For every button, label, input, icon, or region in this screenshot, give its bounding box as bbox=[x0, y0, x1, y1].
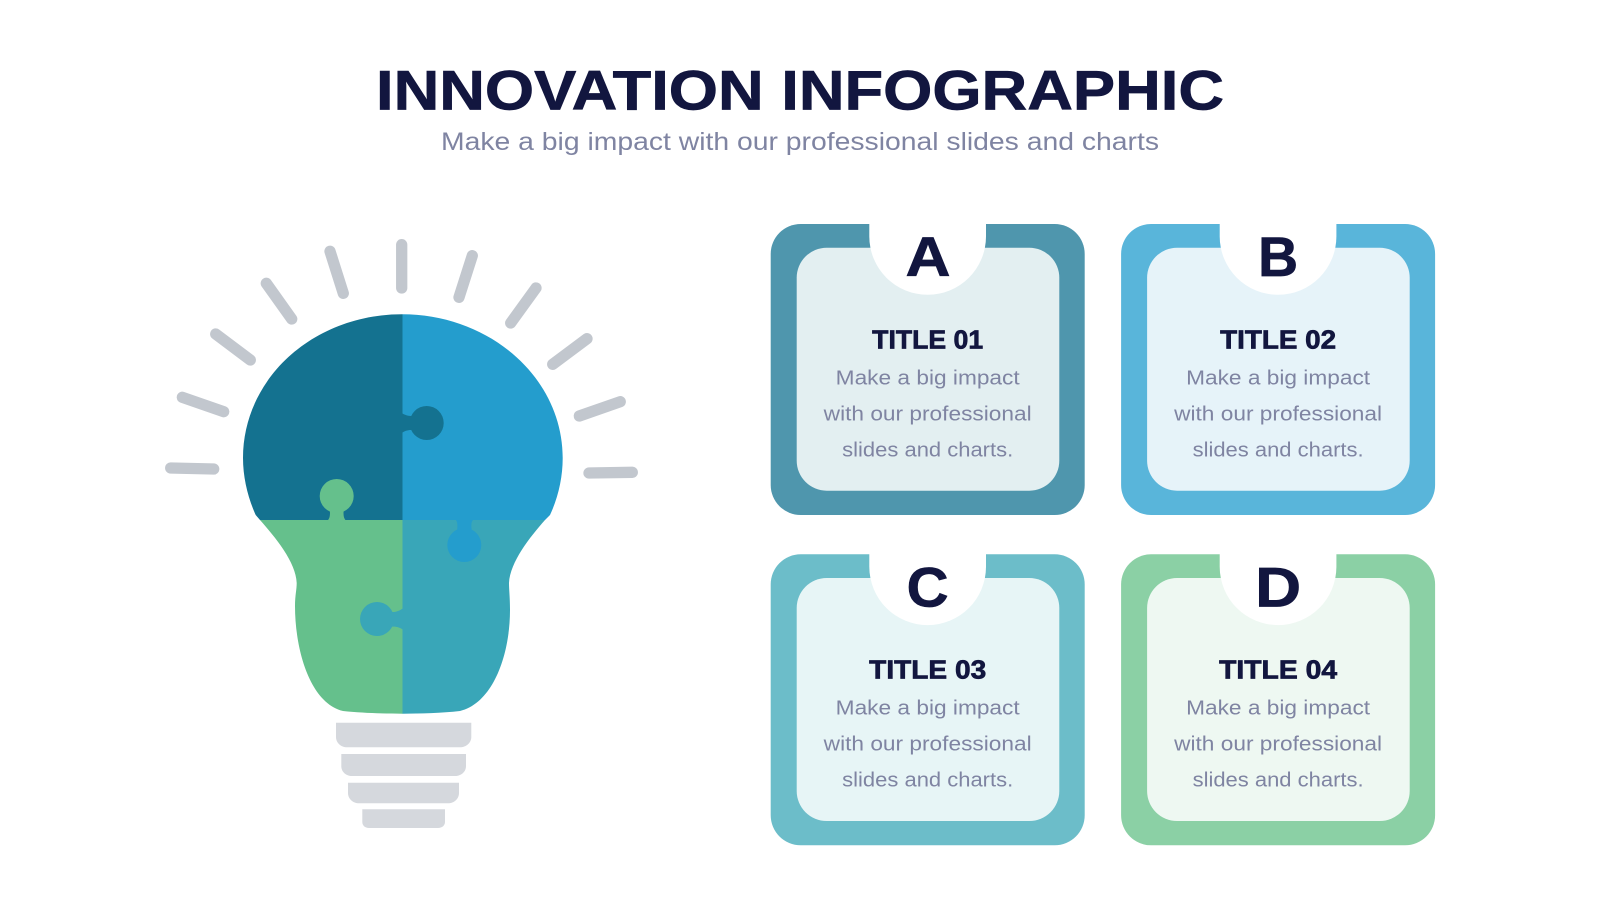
text block bbox=[1173, 697, 1382, 791]
puzzle tab: teal bbox=[360, 602, 404, 636]
text block: slides and charts. bbox=[842, 769, 1013, 791]
heading: title 02: TITLE 02 bbox=[1220, 324, 1336, 354]
panel: card B bbox=[1121, 223, 1435, 515]
subtitle: Make a big impact with our professional slides and charts bbox=[441, 128, 1159, 156]
heading: title 03: TITLE 03 bbox=[869, 655, 986, 685]
puzzle tab: blue bbox=[447, 519, 481, 562]
text block: Make a big impact bbox=[1186, 697, 1371, 719]
panel: card C bbox=[771, 553, 1085, 845]
text block bbox=[1173, 368, 1382, 462]
text block: Make a big impact bbox=[836, 697, 1020, 719]
text block: with our professional bbox=[823, 733, 1032, 755]
heading: title 01: TITLE 01 bbox=[872, 324, 983, 354]
text block: with our professional bbox=[823, 404, 1032, 426]
text block: slides and charts. bbox=[842, 440, 1013, 462]
heading: title 04: TITLE 04 bbox=[1219, 655, 1338, 685]
text block: slides and charts. bbox=[1193, 440, 1364, 462]
text block: Make a big impact bbox=[836, 368, 1020, 390]
letter B: B bbox=[1258, 225, 1298, 288]
puzzle tab: dark teal bbox=[401, 406, 444, 440]
text block: Make a big impact bbox=[1186, 368, 1371, 390]
icon: light rays bbox=[171, 245, 632, 473]
icon: puzzle light bulb bbox=[243, 314, 563, 714]
panel: card D bbox=[1121, 553, 1435, 845]
letter D: D bbox=[1255, 555, 1301, 618]
title: INNOVATION INFOGRAPHIC bbox=[376, 58, 1224, 122]
icon: bulb base bbox=[336, 723, 471, 828]
text block: with our professional bbox=[1173, 733, 1382, 755]
text block: slides and charts. bbox=[1193, 769, 1364, 791]
letter C: C bbox=[907, 555, 949, 618]
text block bbox=[823, 697, 1032, 791]
panel: card A bbox=[771, 223, 1085, 515]
text block bbox=[823, 368, 1032, 462]
text block: with our professional bbox=[1173, 404, 1382, 426]
puzzle tab: green bbox=[320, 479, 354, 521]
letter A: A bbox=[906, 225, 950, 288]
